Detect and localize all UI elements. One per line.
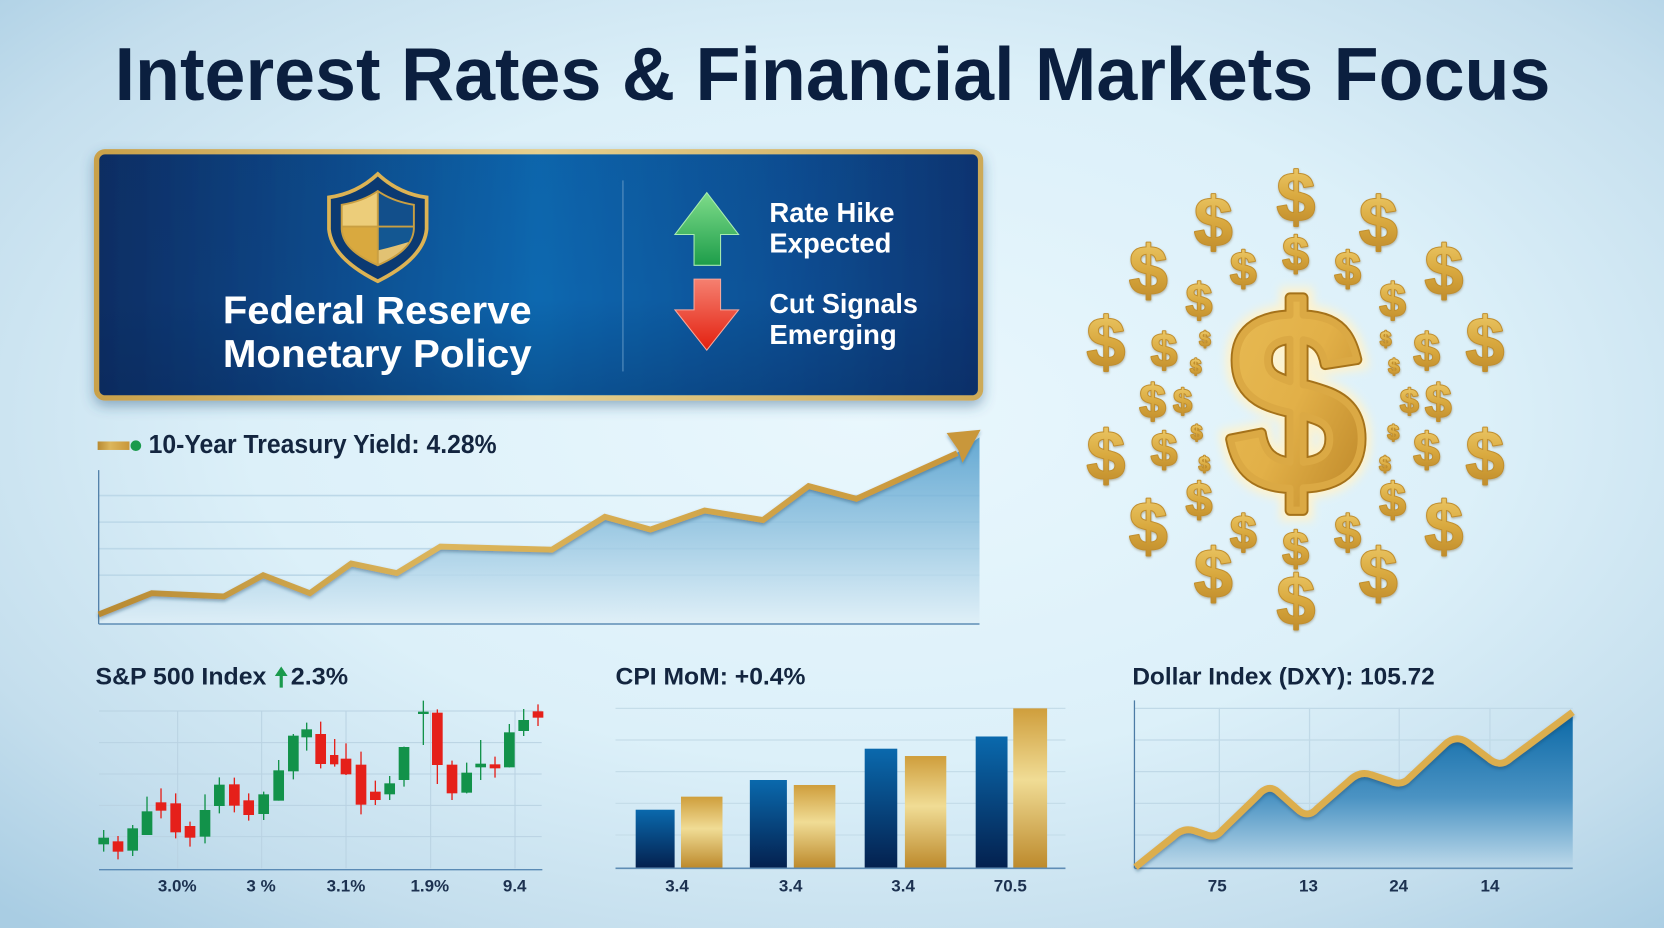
middle ring of dollars: $ — [1282, 228, 1309, 281]
heading: Dollar Index: Dollar Index (DXY): 105.72 — [1132, 663, 1435, 690]
small inner dollars: $ — [1388, 357, 1400, 379]
legend: 10-Year Treasury Yield: 10-Year Treasury Yield: 4.28% — [149, 431, 497, 459]
outer ring of dollars: $ — [1277, 158, 1315, 236]
middle ring of dollars: $ — [1151, 325, 1177, 378]
axis labels: S&P 500: 1.9% — [410, 876, 449, 895]
small inner dollars: $ — [1400, 383, 1419, 420]
heading: S&P 500 Index: S&P 500 Index — [96, 663, 267, 690]
axis labels: DXY — [1208, 876, 1500, 895]
icon: small green arrow — [275, 666, 288, 688]
outer ring of dollars: $ — [1425, 231, 1463, 309]
text: Rate Hike Expected — [769, 197, 895, 259]
middle ring of dollars: $ — [1230, 243, 1257, 296]
red candles — [113, 704, 543, 859]
bar chart: CPI — [616, 708, 1065, 868]
icon: green up arrow — [675, 193, 739, 265]
icon: large dollar with glow: $ — [1227, 255, 1365, 546]
middle ring of dollars: $ — [1334, 506, 1361, 559]
axis labels: DXY: 13 — [1299, 876, 1318, 895]
icon: large dollar with glow: $ — [1227, 255, 1365, 546]
small inner dollars — [1173, 329, 1419, 476]
axis labels: DXY: 24 — [1389, 876, 1409, 895]
axis labels: CPI — [665, 876, 1027, 895]
small inner dollars: $ — [1379, 454, 1391, 476]
text: Rate Hike Expected: Rate Hike — [769, 197, 895, 228]
heading: CPI MoM: CPI MoM: +0.4% — [616, 663, 806, 690]
middle ring of dollars: $ — [1413, 325, 1440, 378]
candlestick chart: S&P 500 — [98, 701, 543, 870]
outer ring of dollars: $ — [1087, 416, 1125, 494]
outer ring of dollars — [1087, 158, 1504, 639]
axis labels: DXY: 14 — [1481, 876, 1500, 895]
outer ring of dollars: $ — [1466, 303, 1504, 381]
outer ring of dollars: $ — [1425, 487, 1463, 565]
middle ring of dollars: $ — [1186, 474, 1212, 527]
text: Cut Signals Emerging: Emerging — [769, 319, 897, 350]
small inner dollars: $ — [1173, 383, 1192, 420]
middle ring of dollars: $ — [1334, 243, 1361, 296]
small inner dollars: $ — [1191, 421, 1203, 444]
small inner dollars: $ — [1199, 329, 1211, 351]
small inner dollars: $ — [1190, 357, 1201, 379]
axis labels: S&P 500: 3.0% — [158, 876, 197, 895]
outer ring of dollars: $ — [1194, 535, 1233, 613]
outer ring of dollars: $ — [1359, 535, 1398, 613]
text: Rate Hike Expected: Expected — [769, 228, 891, 259]
text: Federal Reserve Monetary Policy — [223, 289, 532, 376]
panel: Federal Reserve monetary policy — [97, 152, 981, 398]
small inner dollars: $ — [1388, 421, 1400, 444]
small inner dollars: $ — [1380, 329, 1391, 351]
middle ring of dollars: $ — [1379, 474, 1406, 527]
middle ring of dollars: $ — [1282, 523, 1309, 576]
text: Cut Signals Emerging: Cut Signals — [769, 288, 918, 319]
area chart: DXY — [1134, 700, 1573, 868]
outer ring of dollars: $ — [1129, 487, 1168, 565]
axis labels: S&P 500 — [158, 876, 527, 895]
axis labels: CPI: 3.4 — [665, 876, 689, 895]
heading: S&P 500 Index: 2.3% — [291, 663, 348, 690]
arrow head — [947, 430, 981, 463]
middle ring of dollars: $ — [1151, 424, 1177, 477]
axis labels: CPI: 70.5 — [994, 876, 1027, 895]
middle ring of dollars: $ — [1413, 424, 1440, 477]
icon: large dollar with glow: $ — [1227, 255, 1365, 546]
outer ring of dollars: $ — [1359, 183, 1398, 261]
axis labels: CPI: 3.4 — [779, 876, 803, 895]
text: Cut Signals Emerging — [769, 288, 918, 350]
middle ring of dollars — [1139, 228, 1452, 576]
middle ring of dollars: $ — [1230, 506, 1257, 559]
green candles — [98, 701, 529, 856]
axis labels: S&P 500: 3 % — [246, 876, 276, 895]
axis labels: CPI: 3.4 — [891, 876, 915, 895]
outer ring of dollars: $ — [1466, 416, 1504, 494]
icon: shield — [329, 174, 427, 281]
outer ring of dollars: $ — [1194, 183, 1233, 261]
outer ring of dollars: $ — [1129, 231, 1168, 309]
illustration: gold dollar signs — [1087, 158, 1504, 639]
heading: S&P 500 Index — [96, 663, 348, 690]
middle ring of dollars: $ — [1139, 375, 1166, 428]
title: Interest Rates & Financial Markets Focus — [115, 32, 1550, 116]
axis labels: S&P 500: 3.1% — [327, 876, 365, 895]
text: Federal Reserve Monetary Policy: Monetary Policy — [223, 332, 532, 376]
outer ring of dollars: $ — [1277, 561, 1315, 639]
middle ring of dollars: $ — [1379, 275, 1406, 328]
axis labels: DXY: 75 — [1208, 876, 1227, 895]
text: Federal Reserve Monetary Policy: Federal Reserve — [223, 289, 532, 333]
icon: red down arrow — [675, 279, 739, 350]
middle ring of dollars: $ — [1425, 375, 1452, 428]
outer ring of dollars: $ — [1087, 303, 1125, 381]
axis labels: S&P 500: 9.4 — [503, 876, 527, 895]
middle ring of dollars: $ — [1186, 275, 1212, 328]
line chart: treasury yield — [99, 430, 981, 624]
small inner dollars: $ — [1199, 454, 1210, 476]
